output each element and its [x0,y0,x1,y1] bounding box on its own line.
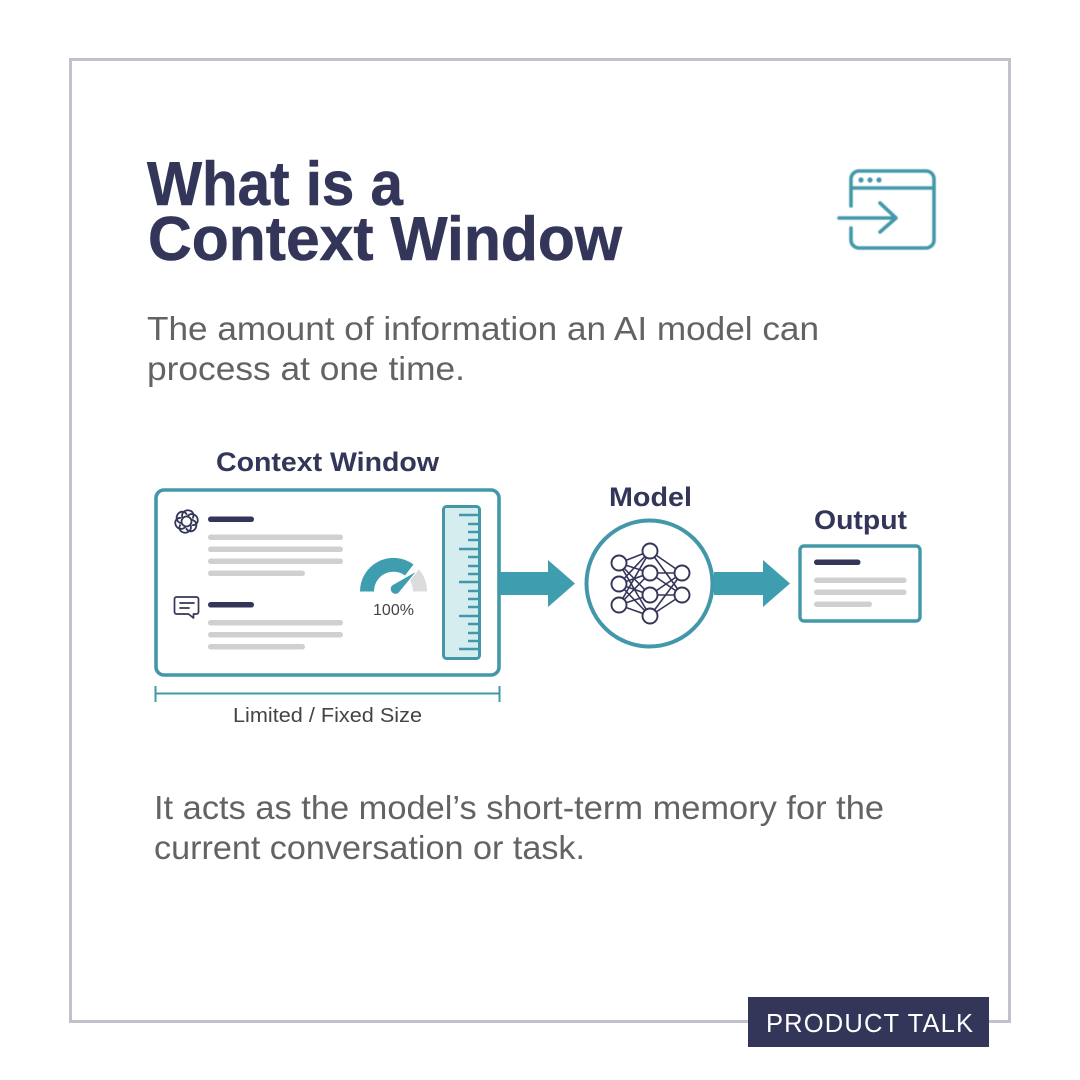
diagram: context window to model to output [156,447,920,727]
badge: Product Talk [748,997,989,1047]
gauge: 100% [360,558,427,619]
intro text [147,310,819,387]
heading: Output: Output [814,505,907,535]
closing text: current conversation or task. [154,829,585,866]
title: What is a [147,149,404,219]
label: limited / fixed size: Limited / Fixed Size [233,705,422,727]
icon: chat bubble [174,597,198,618]
model circle with neural network [586,520,712,646]
panel: context window [156,490,499,675]
heading: Context Window: Context Window [216,447,440,477]
ruler [444,506,480,658]
panel: output [800,546,920,621]
icon: browser window with entering arrow [839,171,934,248]
intro text: The amount of information an AI model can [147,310,819,347]
message lines: user [208,602,343,650]
closing text: It acts as the model’s short-term memory for the [154,789,884,826]
icon: AI logo [173,510,200,533]
closing text [154,789,884,866]
title [147,149,622,274]
intro text: process at one time. [147,350,465,387]
page frame [70,60,1010,1022]
arrow: model to output [714,560,790,607]
dimension bracket [156,686,500,727]
message lines: AI [208,516,343,576]
title: Context Window [148,204,622,274]
badge: Product Talk: PRODUCT TALK [766,1010,973,1038]
gauge: 100%: 100% [373,602,414,619]
heading: Model: Model [609,482,692,512]
arrow: window to model [500,560,575,607]
